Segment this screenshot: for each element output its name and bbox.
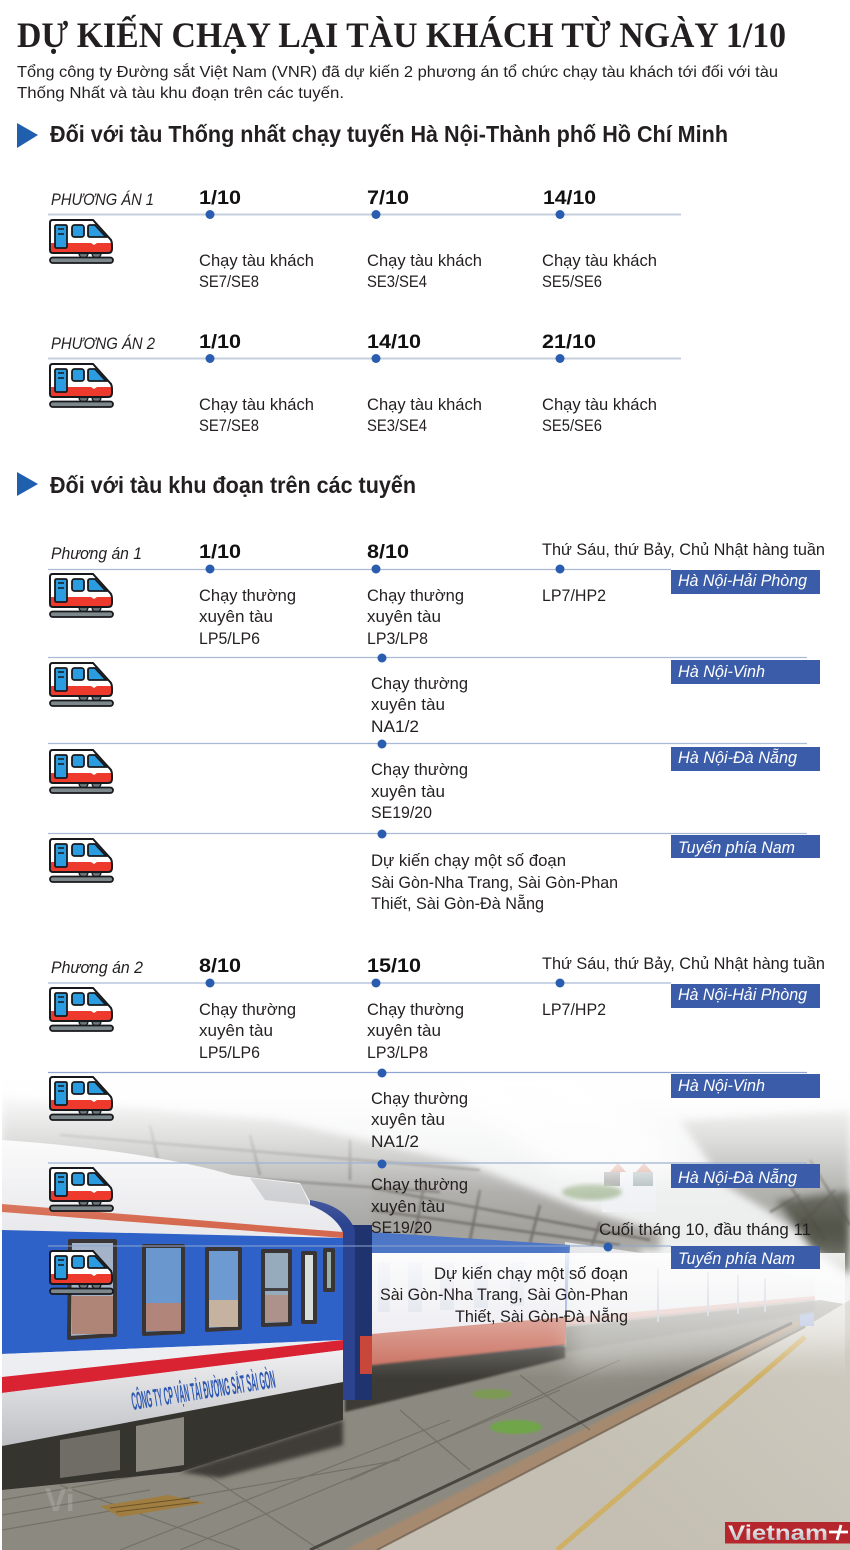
panel: regional option 2: SE19/20: [371, 1218, 432, 1237]
panel: regional option 2: xuyên tàu: [367, 1021, 441, 1040]
panel: regional option 1: Hà Nội-Đà Nẵng: [678, 748, 798, 767]
panel: regional option 2: Chạy thường: [199, 1000, 296, 1019]
panel: regional option 2: LP3/LP8: [367, 1043, 428, 1062]
panel: regional option 2: 8/10: [199, 956, 241, 977]
panel: Thống Nhất option 2 timeline: 21/10: [542, 332, 596, 353]
panel: Thống Nhất option 1 timeline: PHƯƠNG ÁN 1: [51, 190, 154, 209]
panel: Thống Nhất option 1 timeline: SE5/SE6: [542, 272, 602, 291]
panel: Thống Nhất option 2 timeline: SE3/SE4: [367, 416, 427, 435]
panel: regional option 2: NA1/2: [371, 1132, 419, 1151]
ground and tracks: [2, 1300, 850, 1550]
intro text: Thống Nhất và tàu khu đoạn trên các tuyến.: [17, 85, 344, 102]
panel: regional option 2: LP5/LP6: [199, 1043, 260, 1062]
panel: Thống Nhất option 2 timeline: SE5/SE6: [542, 416, 602, 435]
panel: regional option 1: Phương án 1: [51, 544, 142, 563]
panel: regional option 2: Phương án 2: [51, 958, 143, 977]
panel: regional option 2: Chạy thường: [371, 1175, 468, 1194]
panel: Thống Nhất option 2 timeline: 14/10: [367, 332, 421, 353]
panel: regional option 1: Thứ Sáu, thứ Bảy, Chủ Nhật hàng tuần: [542, 540, 825, 559]
undercarriage: [2, 1382, 343, 1490]
panel: regional option 1: xuyên tàu: [371, 782, 445, 801]
panel: regional option 2: Chạy thường: [371, 1089, 468, 1108]
panel: regional option 1: NA1/2: [371, 717, 419, 736]
panel: Thống Nhất option 2 timeline: 1/10: [199, 332, 241, 353]
panel: regional option 2: Sài Gòn-Nha Trang, Sài Gòn-Phan: [380, 1285, 628, 1304]
intro text: [17, 62, 778, 102]
panel: Thống Nhất option 2 timeline: Chạy tàu khách: [199, 395, 314, 414]
windows: [69, 1241, 333, 1338]
panel: regional option 2: Hà Nội-Vinh: [678, 1076, 765, 1095]
panel: regional option 2: Dự kiến chạy một số đoạn: [434, 1264, 628, 1283]
title: DỰ KIẾN CHẠY LẠI TÀU KHÁCH TỪ NGÀY 1/10: [17, 15, 786, 55]
panel: regional option 2: xuyên tàu: [199, 1021, 273, 1040]
panel: Thống Nhất option 2 timeline: PHƯƠNG ÁN 2: [51, 334, 155, 353]
heading: regional trains: Đối với tàu khu đoạn trên các tuyến: [50, 472, 416, 498]
panel: regional option 1: Sài Gòn-Nha Trang, Sài Gòn-Phan: [371, 873, 618, 892]
panel: regional option 1: SE19/20: [371, 803, 432, 822]
panel: regional option 1: LP3/LP8: [367, 629, 428, 648]
panel: regional option 1: Dự kiến chạy một số đoạn: [371, 851, 566, 870]
panel: regional option 1: Chạy thường: [367, 586, 464, 605]
panel: regional option 2: Tuyến phía Nam: [678, 1249, 795, 1268]
panel: regional option 1: xuyên tàu: [199, 607, 273, 626]
panel: regional option 1: [48, 540, 825, 913]
panel: regional option 1: Tuyến phía Nam: [678, 838, 795, 857]
panel: regional option 2: Hà Nội-Đà Nẵng: [678, 1168, 798, 1187]
panel: regional option 2: Cuối tháng 10, đầu tháng 11: [599, 1220, 811, 1239]
panel: regional option 2: Thiết, Sài Gòn-Đà Nẵng: [455, 1307, 628, 1326]
logo: Vietnam+: Vietnam: [728, 1522, 828, 1545]
panel: regional option 2: LP7/HP2: [542, 1000, 606, 1019]
panel: Thống Nhất option 1 timeline: SE7/SE8: [199, 272, 259, 291]
logo: Vietnam+: [725, 1522, 850, 1545]
panel: regional option 2: xuyên tàu: [371, 1110, 445, 1129]
panel: regional option 1: 1/10: [199, 542, 241, 563]
panel: Thống Nhất option 2 timeline: Chạy tàu khách: [367, 395, 482, 414]
panel: regional option 2: Chạy thường: [367, 1000, 464, 1019]
panel: regional option 1: Thiết, Sài Gòn-Đà Nẵng: [371, 894, 544, 913]
watermark: Vi: [45, 1482, 75, 1518]
panel: regional option 1: 8/10: [367, 542, 409, 563]
panel: regional option 2: Thứ Sáu, thứ Bảy, Chủ Nhật hàng tuần: [542, 954, 825, 973]
panel: Thống Nhất option 1 timeline: 7/10: [367, 188, 409, 209]
panel: Thống Nhất option 2 timeline: [48, 332, 681, 435]
panel: Thống Nhất option 1 timeline: SE3/SE4: [367, 272, 427, 291]
far carriages: [565, 1242, 815, 1352]
overlays: [0, 1060, 850, 1225]
intro text: Tổng công ty Đường sắt Việt Nam (VNR) đã dự kiến 2 phương án tổ chức chạy tàu khách tới đối với tàu: [17, 62, 778, 81]
panel: Thống Nhất option 1 timeline: Chạy tàu khách: [542, 251, 657, 270]
panel: regional option 2: 15/10: [367, 956, 421, 977]
panel: Thống Nhất option 1 timeline: [48, 188, 681, 291]
panel: regional option 2: xuyên tàu: [371, 1197, 445, 1216]
panel: Thống Nhất option 2 timeline: Chạy tàu khách: [542, 395, 657, 414]
second carriage: [345, 1222, 570, 1412]
panel: Thống Nhất option 1 timeline: 14/10: [543, 188, 596, 209]
panel: Thống Nhất option 1 timeline: Chạy tàu khách: [367, 251, 482, 270]
panel: regional option 1: xuyên tàu: [367, 607, 441, 626]
panel: regional option 2: Hà Nội-Hải Phòng: [678, 985, 808, 1004]
panel: Thống Nhất option 2 timeline: SE7/SE8: [199, 416, 259, 435]
panel: regional option 1: Chạy thường: [199, 586, 296, 605]
heading: Thống Nhất trains: Đối với tàu Thống nhất chạy tuyến Hà Nội-Thành phố Hồ Chí Minh: [50, 121, 728, 147]
panel: regional option 1: Hà Nội-Vinh: [678, 662, 765, 681]
panel: Thống Nhất option 1 timeline: 1/10: [199, 188, 241, 209]
panel: Thống Nhất option 1 timeline: Chạy tàu khách: [199, 251, 314, 270]
panel: regional option 1: Hà Nội-Hải Phòng: [678, 571, 808, 590]
panel: regional option 2: [48, 954, 825, 1326]
background photo: passenger train at station: [0, 1060, 850, 1550]
first carriage: [2, 1140, 355, 1490]
panel: regional option 1: xuyên tàu: [371, 695, 445, 714]
panel: regional option 1: Chạy thường: [371, 760, 468, 779]
background photo: passenger train at station: CÔNG TY CP VẬN TẢI ĐƯỜNG SẮT SÀI GÒN: [129, 1364, 277, 1416]
panel: regional option 1: Chạy thường: [371, 674, 468, 693]
panel: regional option 1: LP7/HP2: [542, 586, 606, 605]
panel: regional option 1: LP5/LP6: [199, 629, 260, 648]
